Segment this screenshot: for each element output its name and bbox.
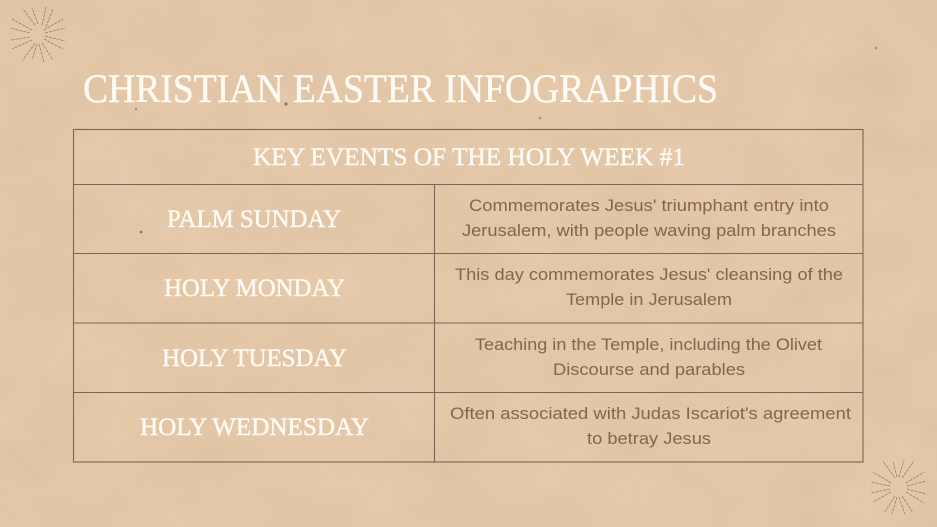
icon: starburst bottom right — [871, 460, 926, 514]
row: Holy Tuesday — [162, 335, 822, 379]
row: Holy Monday: HOLY MONDAY — [164, 275, 345, 302]
row: Holy Tuesday: Teaching in the Temple, including the Olivet — [475, 335, 822, 354]
title: CHRISTIAN EASTER INFOGRAPHICS — [83, 66, 718, 111]
row: Palm Sunday: Jerusalem, with people waving palm branches — [462, 221, 836, 240]
row: Holy Monday — [164, 265, 843, 309]
row: Palm Sunday: PALM SUNDAY — [167, 206, 341, 233]
row: Holy Wednesday: to betray Jesus — [587, 429, 711, 448]
icon: starburst top left — [10, 7, 65, 62]
table grid — [74, 130, 863, 462]
row: Holy Monday: Temple in Jerusalem — [566, 290, 732, 309]
row: Holy Tuesday: HOLY TUESDAY — [162, 345, 347, 372]
table heading: KEY EVENTS OF THE HOLY WEEK #1 — [253, 144, 685, 171]
row: Holy Wednesday: HOLY WEDNESDAY — [140, 414, 369, 441]
row: Holy Tuesday: Discourse and parables — [553, 360, 745, 379]
row: Palm Sunday: Commemorates Jesus' triumphant entry into — [469, 196, 829, 215]
row: Holy Monday: This day commemorates Jesus' cleansing of the — [455, 265, 843, 284]
row: Holy Wednesday — [140, 404, 851, 448]
row: Palm Sunday — [167, 196, 836, 240]
row: Holy Wednesday: Often associated with Judas Iscariot's agreement — [450, 404, 851, 423]
table — [74, 130, 863, 462]
